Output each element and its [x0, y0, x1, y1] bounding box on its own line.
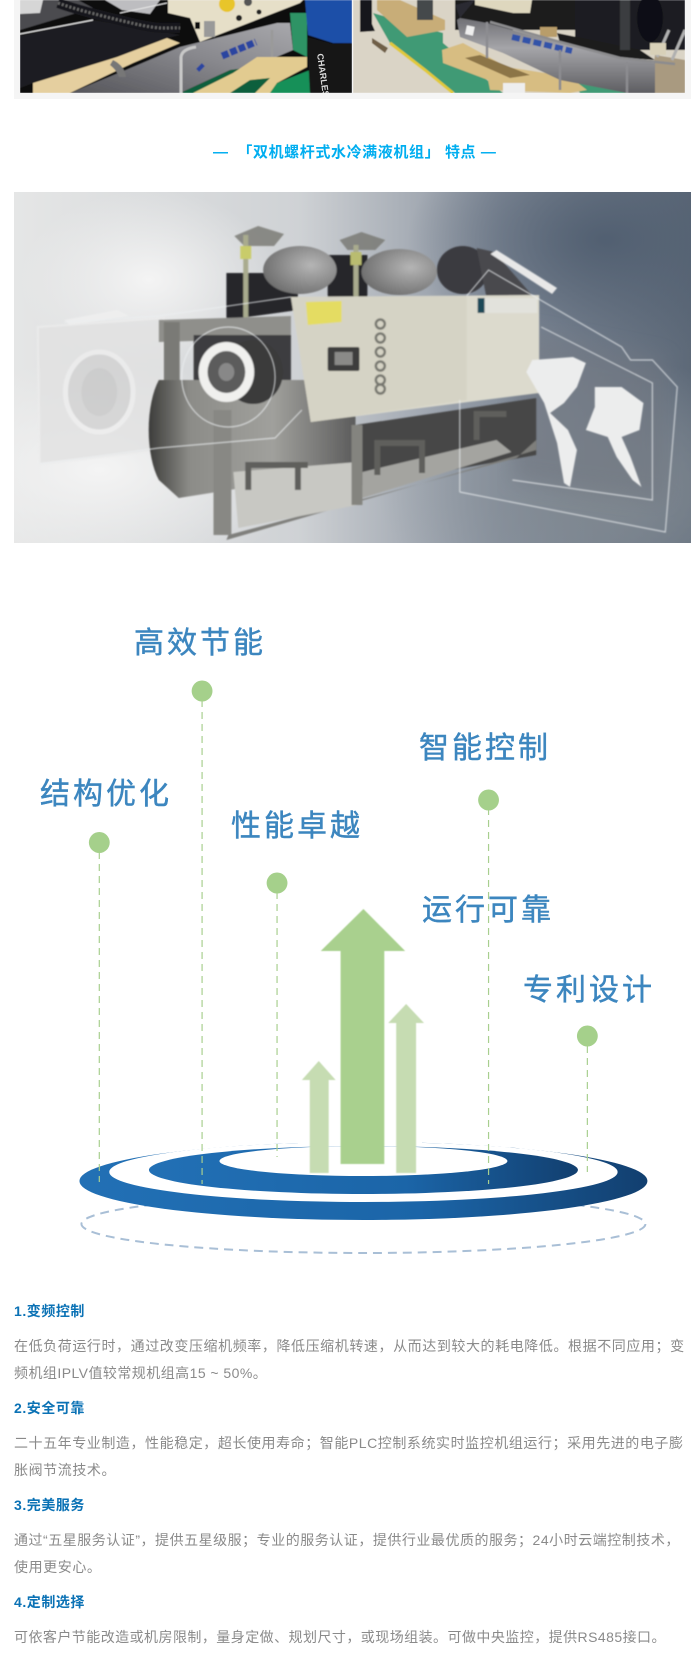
white outline lines [40, 270, 677, 532]
paragraph 4: 可依客户节能改造或机房限制，量身定做、规划尺寸，或现场组装。可做中央监控，提供RS485接口。 [14, 1629, 666, 1645]
hero image: chiller with world map [14, 192, 691, 543]
feature labels: 智能控制 [419, 732, 551, 765]
paragraph 2: 二十五年专业制造，性能稳定，超长使用寿命；智能PLC控制系统实时监控机组运行；采用先进的电子膨 [14, 1435, 684, 1451]
feature dots [89, 680, 598, 1046]
paragraph 1: 频机组IPLV值较常规机组高15 ~ 50%。 [14, 1365, 267, 1381]
heading 4: 4.定制选择 [14, 1594, 85, 1610]
paragraph 2: 胀阀节流技术。 [14, 1462, 116, 1478]
machine [149, 226, 557, 540]
heading 1: 1.变频控制 [14, 1303, 85, 1319]
paragraph 1: 在低负荷运行时，通过改变压缩机频率，降低压缩机转速，从而达到较大的耗电降低。根据不同应用；变 [14, 1338, 685, 1354]
arrows rising [302, 909, 424, 1173]
text section: features list [14, 1303, 685, 1645]
paragraph 2 [14, 1435, 684, 1478]
heading 3: 3.完美服务 [14, 1497, 85, 1513]
feature labels: 运行可靠 [422, 894, 554, 927]
title: — 「双机螺杆式水冷满液机组」 特点 — [213, 144, 497, 161]
paragraph 3: 通过“五星服务认证”，提供五星级服；专业的服务认证，提供行业最优质的服务；24小时云端控制技术， [14, 1532, 680, 1548]
photo: chiller unit with worker [20, 0, 352, 93]
paragraph 1 [14, 1338, 685, 1381]
control panel [291, 295, 539, 422]
world map [526, 357, 643, 487]
frame [159, 316, 291, 342]
paragraph 3: 使用更安心。 [14, 1559, 101, 1575]
rings base [79, 1130, 647, 1253]
feature labels [40, 627, 655, 1007]
motor [223, 340, 283, 404]
feature labels: 高效节能 [134, 627, 266, 660]
ghost panel left [38, 310, 164, 464]
diagram: six features over rings [40, 627, 655, 1254]
heading 2: 2.安全可靠 [14, 1400, 85, 1416]
feature labels: 专利设计 [523, 974, 655, 1007]
feature labels: 结构优化 [40, 778, 172, 811]
paragraph 3 [14, 1532, 680, 1575]
photo: factory floor chiller [353, 0, 685, 93]
dashed leader lines [99, 700, 587, 1184]
feature labels: 性能卓越 [231, 810, 363, 843]
panel: factory photos [14, 0, 691, 99]
